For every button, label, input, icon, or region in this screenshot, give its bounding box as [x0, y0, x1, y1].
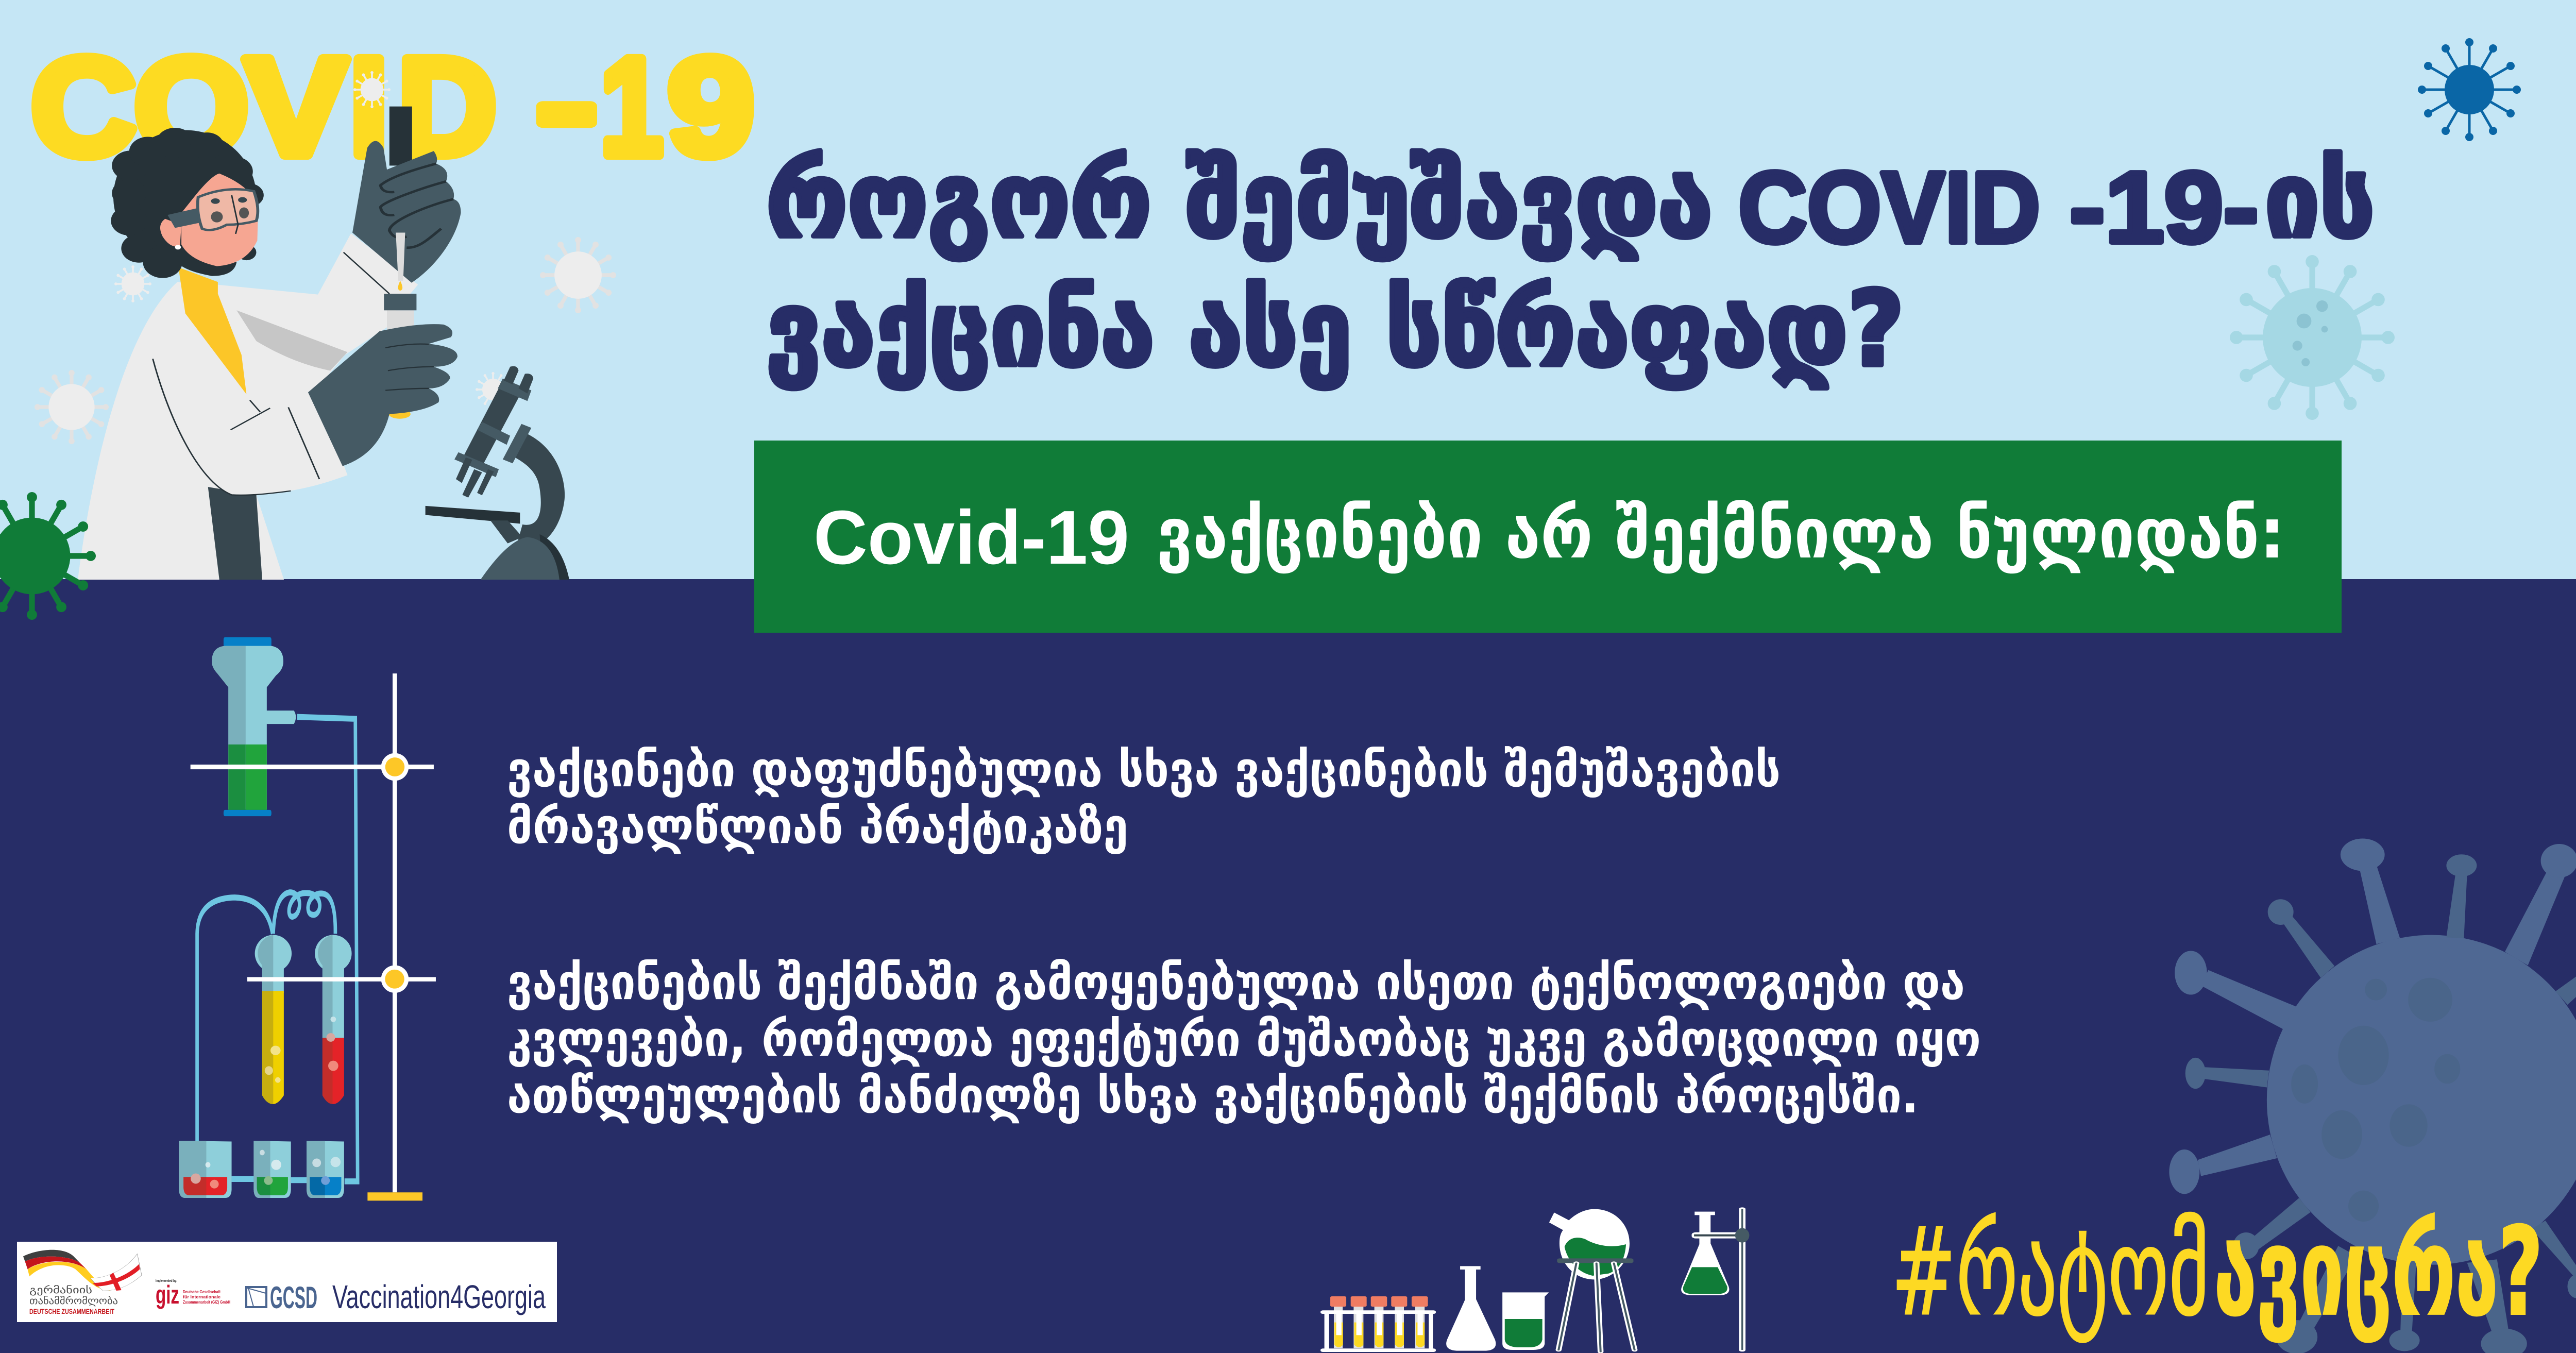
icon: small white virus near shoulder: [114, 265, 151, 302]
logo text: Germany cooperation: [29, 1284, 118, 1315]
scientist: coat sleeve: [153, 359, 347, 495]
logo: giz: Zusammenarbeit (GIZ) GmbH: [183, 1300, 230, 1305]
microscope: stage: [426, 506, 520, 523]
heading: main question: COVID: [1738, 151, 2040, 264]
heading: main question: -19-: [2070, 151, 2259, 264]
logo text: Germany cooperation: DEUTSCHE ZUSAMMENARBEIT: [29, 1307, 114, 1315]
big title: COVID -19: [31, 25, 754, 184]
glassware: test tube rack: [1320, 1296, 1436, 1352]
logo: GCSD: GCSD: [270, 1280, 317, 1315]
scientist: lower glove lines: [385, 344, 434, 391]
scientist: glove finger lines: [381, 164, 453, 248]
logo text: Germany cooperation: თანამშრომლობა: [29, 1295, 118, 1307]
panel: green banner: [754, 441, 2342, 633]
text block: first paragraph: [507, 742, 1781, 855]
glassware: flask on clamp stand: [1681, 1207, 1749, 1351]
scientist: goggles: [167, 189, 258, 234]
scientist: black pipette bulb: [389, 107, 412, 165]
illustration: scientist with pipette: [78, 107, 461, 580]
logo: German-Georgian ribbon: [23, 1250, 142, 1291]
heading: main question: [766, 141, 2375, 390]
illustration: chemistry distillation apparatus: [179, 637, 436, 1200]
heading line 1: როგორ შემუშავდა: [766, 141, 1713, 261]
glassware: empty conical flask: [1446, 1266, 1496, 1351]
big title: COVID -19: I: [349, 29, 388, 184]
big title: COVID -19: C: [31, 29, 136, 184]
scientist: upper glove: [352, 141, 461, 283]
scientist: lab coat: [78, 233, 418, 580]
scientist: glass dropper: [396, 233, 405, 281]
panel: partner logos: [17, 1242, 557, 1322]
icon: small white virus behind microscope: [476, 372, 511, 407]
text block: second paragraph: კვლევები, რომელთა ეფექტური მუშაობაც უკვე გამოცდილი იყო: [507, 1011, 1981, 1068]
background: light blue sky: [0, 0, 2576, 579]
logo: giz: giz: [156, 1280, 179, 1309]
hashtag: #რატომ: [1891, 1202, 2209, 1343]
banner text: ვაქცინები არ შექმნილა ნულიდან:: [1157, 493, 2285, 574]
illustration: microscope: [426, 366, 569, 580]
big title: COVID -19: 1: [600, 29, 663, 184]
icon: light blue virus: [2230, 255, 2395, 420]
scientist: trousers: [208, 487, 262, 580]
icon: green virus: [0, 492, 96, 620]
text block: second paragraph: ვაქცინების შექმნაში გამოყენებულია ისეთი ტექნოლოგიები და: [507, 955, 1965, 1011]
microscope: base: [540, 534, 569, 580]
scientist: coat body fill: [78, 282, 268, 580]
icon: white virus left of scientist: [35, 370, 109, 444]
banner text: [814, 493, 2285, 580]
scientist: bottle: [384, 294, 416, 419]
big title: COVID -19: V: [245, 29, 348, 184]
icon: blue virus top right: [2418, 38, 2521, 141]
apparatus: yellow test tube: [255, 935, 292, 1104]
text block: second paragraph: [507, 955, 1981, 1124]
scientist: ear: [160, 219, 181, 247]
logo: giz: für Internationale: [183, 1295, 221, 1299]
scientist: hair: [111, 128, 264, 278]
scientist: neck shadow: [180, 248, 236, 276]
big title: COVID -19: D: [398, 29, 497, 184]
big title: COVID -19: 9: [668, 29, 754, 184]
glassware: round flask on tripod: [1549, 1209, 1635, 1351]
logo text: Vaccination4Georgia: Vaccination4Georgia: [332, 1278, 546, 1315]
scientist: lower glove: [308, 324, 457, 466]
heading: main question: ის: [2265, 141, 2375, 261]
glassware: measuring beaker: [1502, 1292, 1549, 1350]
text block: second paragraph: ათწლეულების მანძილზე სხვა ვაქცინების შექმნის პროცესში.: [507, 1068, 1919, 1124]
heading line 2: ვაქცინა ასე სწრაფად?: [766, 269, 1904, 390]
text block: first paragraph: მრავალწლიან პრაქტიკაზე: [507, 799, 1128, 855]
apparatus: tubes: [197, 717, 358, 1181]
apparatus: retort stand: [191, 673, 436, 1200]
background: navy lower section: [0, 579, 2576, 1353]
scientist: coat fold lines: [153, 252, 389, 495]
scientist: sleeve shadow: [236, 310, 347, 370]
microscope: arm: [507, 432, 565, 542]
logo: giz: [156, 1279, 230, 1309]
scientist: earring: [175, 245, 181, 249]
logo: GCSD: [246, 1280, 317, 1315]
big title: COVID -19: -: [536, 25, 598, 180]
icon: white virus right of scientist: [540, 237, 616, 313]
logo text: Germany cooperation: გერმანიის: [29, 1284, 92, 1296]
apparatus: green beaker: [253, 1141, 291, 1198]
apparatus: red test tube: [315, 935, 352, 1104]
scientist: yellow drop: [398, 281, 402, 291]
icon: white virus near title: [353, 71, 391, 108]
scientist: yellow sweater: [178, 267, 246, 394]
scientist: face: [181, 174, 258, 266]
apparatus: top column: [212, 637, 296, 816]
icon: large dark virus: [2169, 838, 2576, 1353]
illustration: lab glassware: [1320, 1207, 1749, 1352]
apparatus: red beaker: [179, 1141, 232, 1198]
logo: giz: Implemented by:: [156, 1279, 177, 1283]
microscope: tube: [454, 366, 533, 498]
logo: giz: Deutsche Gesellschaft: [183, 1290, 221, 1294]
big title: COVID -19: O: [134, 29, 249, 184]
apparatus: blue beaker: [307, 1141, 344, 1198]
text block: first paragraph: ვაქცინები დაფუძნებულია სხვა ვაქცინების შემუშავების: [507, 742, 1781, 798]
banner text: Covid-19: [814, 495, 1129, 580]
